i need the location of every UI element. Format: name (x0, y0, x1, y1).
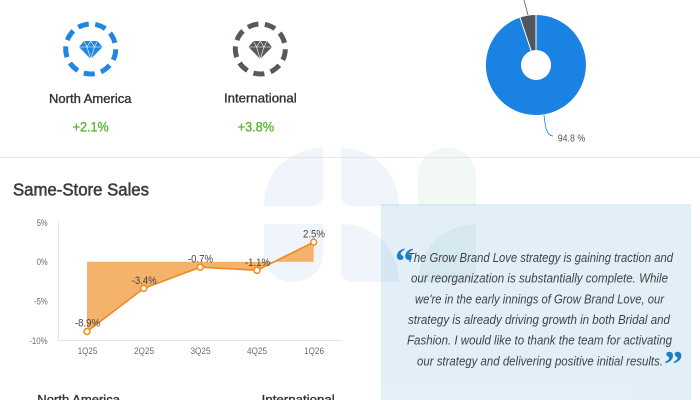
quote text: our reorganization is substantially complete. While (411, 272, 668, 286)
opening quotation mark: “ (395, 241, 414, 283)
label: International: International (224, 92, 297, 106)
data labels: -8.9% (75, 318, 100, 330)
x axis labels (78, 346, 324, 356)
leader line: blue slice (544, 115, 553, 136)
divider (0, 157, 700, 158)
data points (84, 239, 317, 334)
slice: 94.8% blue (486, 15, 586, 115)
x axis labels: 1Q25 (78, 346, 97, 356)
y axis labels: 5% (37, 218, 48, 228)
x axis labels: 1Q26 (304, 346, 324, 356)
value: +2.1%: +2.1% (73, 120, 109, 135)
quote text: we're in the early innings of Grow Brand Love, our (415, 292, 665, 306)
data labels: -3.4% (132, 275, 157, 287)
x axis labels: 3Q25 (190, 346, 210, 356)
y axis labels: 0% (37, 257, 48, 267)
x axis labels: 4Q25 (247, 346, 267, 356)
x axis labels: 2Q25 (134, 346, 154, 356)
area chart: same-store sales (29, 218, 343, 356)
slice: grey remainder (520, 15, 536, 51)
data labels: -0.7% (188, 253, 213, 265)
data labels: 2.5% (303, 229, 325, 241)
label: North America: North America (49, 92, 132, 106)
value: +3.8%: +3.8% (238, 120, 274, 135)
quote text: The Grow Brand Love strategy is gaining traction and (407, 251, 674, 265)
background logo watermark (264, 148, 476, 282)
data labels (75, 229, 325, 330)
quote text: our strategy and delivering positive initial results. (417, 354, 663, 368)
y axis labels: -5% (34, 296, 48, 306)
icon: blue dashed ring with diamond (57, 15, 125, 83)
icon: grey dashed ring with diamond (226, 15, 294, 83)
quote text: strategy is already driving growth in both Bridal and (408, 313, 671, 327)
y axis labels (29, 218, 48, 346)
panel: CEO quote (381, 204, 691, 400)
area fill (87, 242, 314, 332)
line (87, 242, 314, 332)
leader line: grey slice (524, 0, 528, 15)
panel: North America comp (49, 15, 132, 135)
data labels: -1.1% (245, 257, 270, 269)
y axis labels: -10% (29, 336, 48, 346)
label: 94.8 %: 94.8 % (558, 134, 585, 145)
heading: Same-Store Sales: Same-Store Sales (13, 180, 149, 200)
donut chart (486, 0, 586, 145)
slice separators (520, 15, 536, 51)
quote text: Fashion. I would like to thank the team for activating (407, 334, 672, 348)
closing quotation mark: ” (664, 344, 683, 386)
axes (58, 222, 343, 340)
quote background (381, 204, 691, 400)
panel: International comp (224, 15, 297, 135)
quote text (407, 251, 674, 368)
